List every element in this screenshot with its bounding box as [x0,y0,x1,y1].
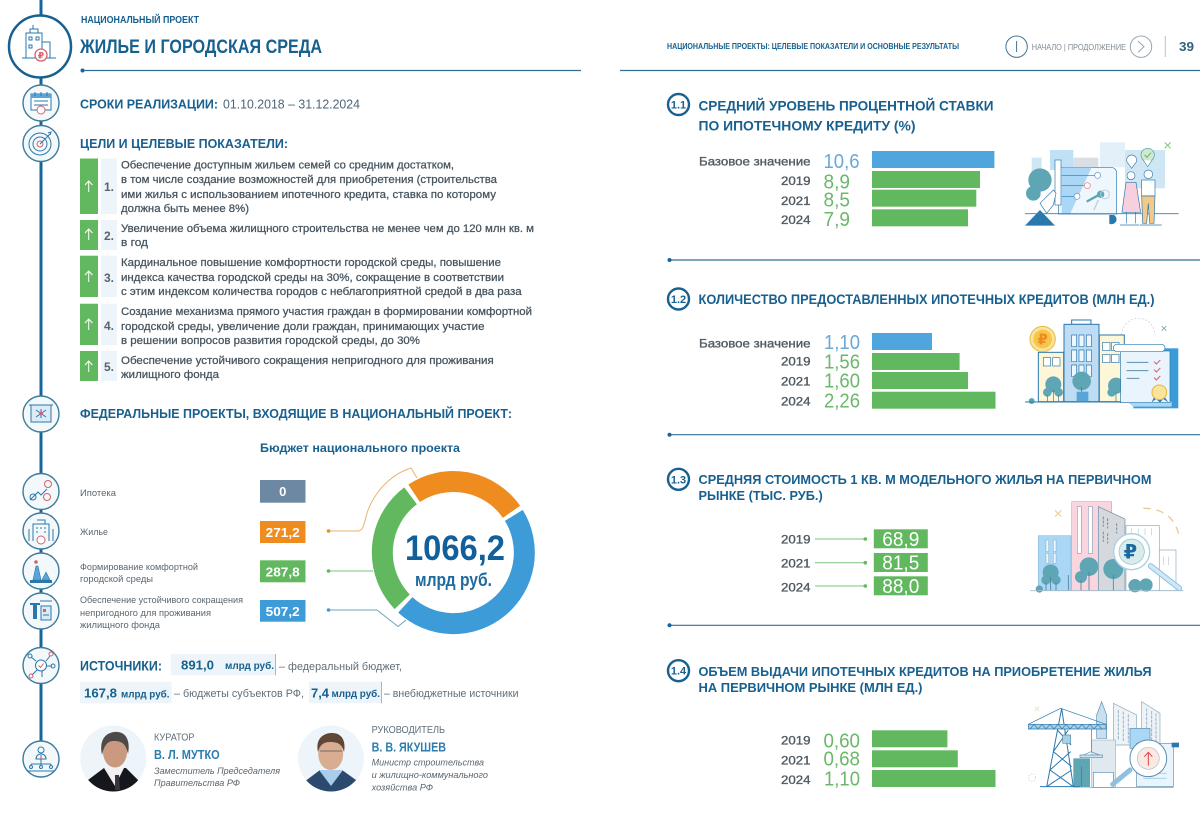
section 1.1: mortgage rate [668,94,1179,231]
heading 1.4: НА ПЕРВИЧНОМ РЫНКЕ (МЛН ЕД.) [698,680,922,695]
heading 1.1: ПО ИПОТЕЧНОМУ КРЕДИТУ (%) [698,118,916,134]
funding sources: млрд руб. [332,688,380,700]
funding sources: 167,8 [84,686,117,701]
heading: goals: ЦЕЛИ И ЦЕЛЕВЫЕ ПОКАЗАТЕЛИ: [80,136,288,151]
goal 3 [80,256,523,298]
funding sources: – бюджеты субъектов РФ, [174,688,304,700]
illustration: couple choosing mortgage [1025,142,1179,226]
icon: sources network [23,648,59,684]
title: ЖИЛЬЕ И ГОРОДСКАЯ СРЕДА [79,37,322,58]
curator caption: Заместитель Председателя [154,766,280,777]
goal 1: в том числе создание возможностей для приобретения (строительства [121,174,498,186]
funding sources: млрд руб. [225,660,274,672]
bar chart 1.2: 2024 [781,394,811,408]
bar chart 1.2: 1,60 [824,370,860,392]
bar chart 1.2: Базовое значение [699,336,811,350]
value list 1.3 [781,529,928,598]
bar chart 1.1: 8,9 [824,171,850,193]
head of project caption [371,725,488,794]
budget row: mortgage: Ипотека [80,488,117,499]
goal 3: индекса качества городской среды на 30%, сокращение в соответствии [121,272,504,284]
budget row: housing [80,521,306,543]
icon: housing project badge: ₽ [38,50,44,60]
goal 1: должна быть менее 8%) [121,203,249,215]
icon: org chart people [23,741,59,777]
divider 3 [668,623,1200,627]
funding sources: – внебюджетные источники [384,688,518,700]
goal 5: жилищного фонда [121,369,220,381]
bar chart 1.4: 1,10 [824,769,860,791]
head of project caption: Министр строительства [372,758,484,769]
icon: calendar [23,85,59,121]
illustration: buildings and contract: ₽ [1038,332,1048,348]
goal 3: Кардинальное повышение комфортности городской среды, повышение [121,257,501,269]
right page running header: НАЦИОНАЛЬНЫЕ ПРОЕКТЫ: ЦЕЛЕВЫЕ ПОКАЗАТЕЛИ И ОСНОВНЫЕ РЕЗУЛЬТАТЫ [667,42,959,51]
heading 1.3: СРЕДНЯЯ СТОИМОСТЬ 1 КВ. М МОДЕЛЬНОГО ЖИЛЬЯ НА ПЕРВИЧНОМ [698,472,1152,487]
curator caption: В. Л. МУТКО [154,747,220,762]
badge 1.2 [668,288,689,310]
bar chart 1.1: Базовое значение [699,155,811,169]
heading: budget: Бюджет национального проекта [260,441,460,455]
funding sources: 891,0 [181,658,214,672]
bar chart 1.4 [781,730,996,791]
right header divider [620,70,1200,72]
budget row: unfit housing [80,595,306,631]
illustration: buildings and contract [1025,318,1178,408]
goal 2: Увеличение объема жилищного строительства не менее чем до 120 млн кв. м [121,223,534,235]
goal 4 [80,304,532,347]
divider 1 [668,258,1200,262]
goal 1: Обеспечение доступным жильем семей со средним достатком, [121,160,454,172]
donut chart: budget [382,481,524,624]
funding sources: 7,4 [311,686,330,700]
donut chart: budget: млрд руб. [415,570,492,590]
heading 1.1: СРЕДНИЙ УРОВЕНЬ ПРОЦЕНТНОЙ СТАВКИ [698,97,994,114]
bar chart 1.2: 2,26 [824,390,860,412]
icon: housing project badge [9,16,71,78]
navigation: start and continuation [1006,36,1165,57]
value list 1.3: 2021 [781,557,811,571]
budget row: urban environment: 287,8 [266,564,300,580]
goal 2: в год [121,237,149,249]
goal 4: Создание механизма прямого участия граждан в формировании комфортной [121,306,532,318]
illustration: city under magnifier [1030,502,1183,593]
heading 1.1 [698,97,994,134]
bar chart 1.1: 8,5 [824,190,850,212]
funding sources: – федеральный бюджет, [279,661,402,673]
value list 1.3: 81,5 [882,552,919,574]
badge 1.1: 1.1 [671,100,686,112]
divider 2 [668,433,1200,437]
bar chart 1.2: 2019 [781,355,811,369]
heading: federal projects: ФЕДЕРАЛЬНЫЕ ПРОЕКТЫ, ВХОДЯЩИЕ В НАЦИОНАЛЬНЫЙ ПРОЕКТ: [80,406,512,421]
bar chart 1.2: 2021 [781,375,811,389]
budget row: unfit housing: 507,2 [266,604,300,619]
illustration: city under magnifier: ₽ [1124,543,1137,564]
goal 3: 3. [104,271,114,285]
head of project caption: В. В. ЯКУШЕВ [372,740,446,755]
badge 1.4 [668,660,689,681]
goal 3: с этим индексом количества городов с неблагоприятной средой в два раза [121,286,523,298]
bar chart 1.4: 2024 [781,773,811,787]
connectors from values to donut [327,468,417,626]
value list 1.3: 68,9 [882,529,919,551]
page number: 39 [1179,39,1194,54]
section 1.3: cost per square metre [668,469,1183,598]
icon: construction tools [23,593,59,629]
title divider [80,68,581,72]
badge 1.4: 1.4 [671,666,687,678]
goal 2 [80,220,534,250]
bar chart 1.4: 0,68 [824,749,860,771]
icon: target [23,126,59,162]
budget row: unfit housing: непригодного для проживания [80,608,211,619]
navigation: start and continuation: НАЧАЛО | ПРОДОЛЖЕНИЕ [1032,42,1126,52]
bar chart 1.1: 2024 [781,213,811,227]
head of project caption: и жилищно-коммунального [372,770,488,781]
goal 5: 5. [104,360,114,374]
portrait: head of project [298,726,364,792]
goal 1: ими жилья с использованием ипотечного кредита, ставка по которому [121,189,497,201]
left page timeline spine [40,0,42,745]
bar chart 1.2: 1,56 [824,351,860,373]
bar chart 1.1: 7,9 [824,209,850,231]
heading 1.2: КОЛИЧЕСТВО ПРЕДОСТАВЛЕННЫХ ИПОТЕЧНЫХ КРЕДИТОВ (МЛН ЕД.) [698,291,1154,307]
badge 1.3 [668,469,689,490]
funding sources [80,654,518,703]
value list 1.3: 88,0 [882,576,919,598]
bar chart 1.2: 1,10 [824,332,860,354]
curator caption: Правительства РФ [154,778,240,789]
heading 1.3 [698,472,1152,503]
budget row: urban environment [80,560,306,585]
badge 1.3: 1.3 [671,474,686,486]
bar chart 1.1: 10,6 [824,151,860,173]
head of project caption: хозяйства РФ [371,783,433,794]
goal 2: 2. [104,229,114,243]
bar chart 1.4: 0,60 [824,730,860,752]
bar chart 1.1: 2019 [781,174,811,188]
budget row: urban environment: городской среды [80,574,153,585]
section 1.2: number of mortgages [668,288,1178,412]
icon: federal projects board [23,396,59,432]
goal 4: в решении вопросов развития городской среды, до 30% [121,335,420,347]
budget row: urban environment: Формирование комфортной [80,562,198,573]
curator caption [154,733,280,789]
curator caption: КУРАТОР [154,733,195,744]
heading 1.4: ОБЪЕМ ВЫДАЧИ ИПОТЕЧНЫХ КРЕДИТОВ НА ПРИОБРЕТЕНИЕ ЖИЛЬЯ [698,664,1152,679]
budget row: unfit housing: Обеспечение устойчивого сокращения [80,595,243,606]
illustration: construction crane [1028,702,1179,787]
icon: urban environment [23,553,59,589]
goal 5 [80,351,494,381]
bar chart 1.4: 2019 [781,733,811,747]
goal 4: 4. [104,319,114,333]
goal 5: Обеспечение устойчивого сокращения непригодного для проживания [121,355,494,367]
kicker: national project: НАЦИОНАЛЬНЫЙ ПРОЕКТ [81,13,199,26]
badge 1.1 [668,94,689,115]
bar chart 1.1: 2021 [781,194,811,208]
budget row: mortgage [80,480,306,503]
implementation dates [80,96,360,112]
implementation dates: 01.10.2018 – 31.12.2024 [223,96,360,112]
funding sources: млрд руб. [121,688,170,700]
goal 1 [80,158,498,215]
badge 1.2: 1.2 [671,294,686,306]
implementation dates: СРОКИ РЕАЛИЗАЦИИ: [80,96,218,112]
goal 1: 1. [104,180,114,194]
heading 1.4 [698,664,1152,695]
budget row: housing: 271,2 [266,525,300,540]
goal 4: городской среды, увеличение доли граждан, принимающих участие [121,321,484,333]
budget row: mortgage: 0 [279,484,286,499]
budget row: unfit housing: жилищного фонда [80,620,161,631]
icon: housing building [23,513,59,549]
funding sources: ИСТОЧНИКИ: [80,658,162,674]
bar chart 1.2 [699,332,996,412]
portrait: curator [80,726,146,792]
heading 1.3: РЫНКЕ (ТЫС. РУБ.) [698,488,823,503]
section 1.4: mortgage volume [668,660,1179,791]
head of project caption: РУКОВОДИТЕЛЬ [372,725,445,736]
bar chart 1.1 [699,151,994,231]
bar chart 1.4: 2021 [781,753,811,767]
donut chart: budget: 1066,2 [405,529,505,568]
icon: mortgage key [23,474,59,510]
value list 1.3: 2024 [781,580,811,594]
value list 1.3: 2019 [781,532,811,546]
budget row: housing: Жилье [80,527,108,538]
